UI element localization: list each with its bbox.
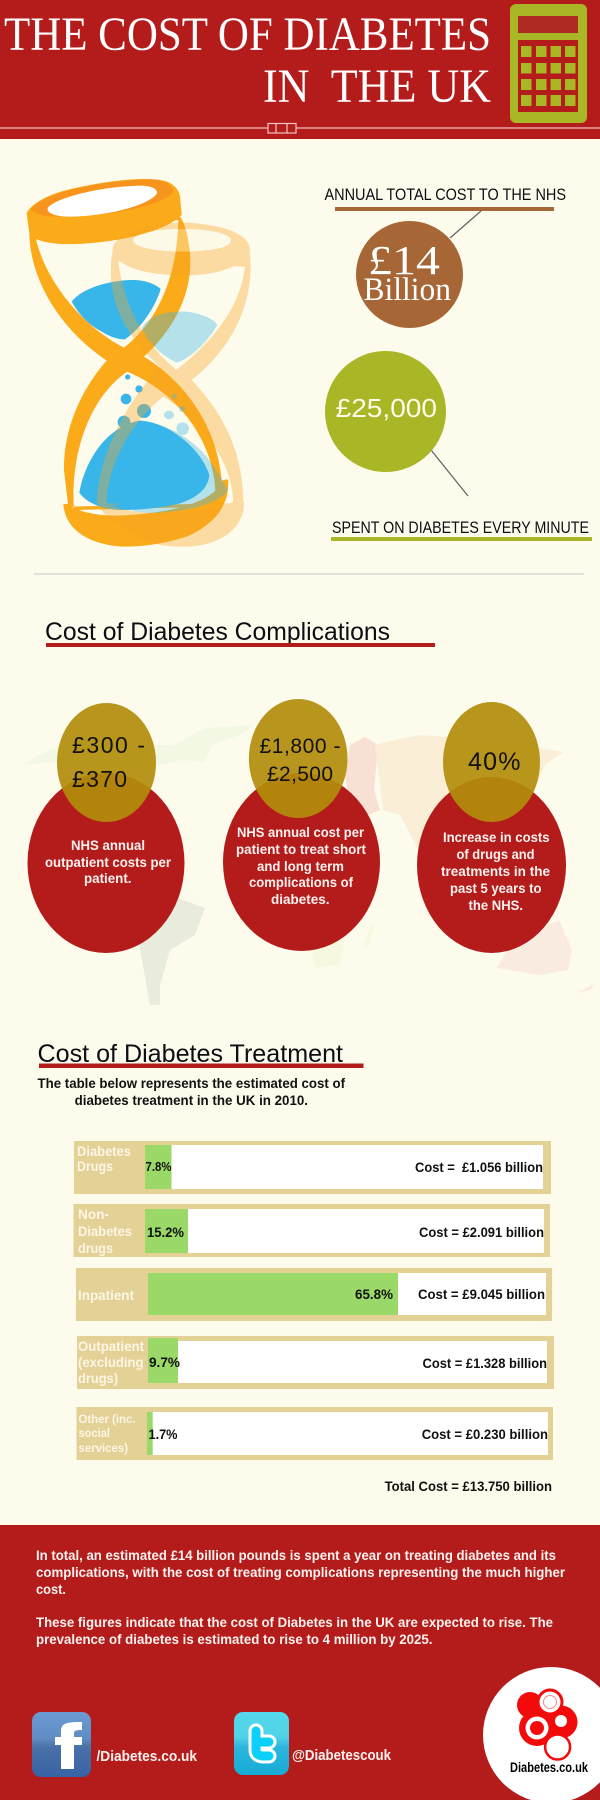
description 1: NHS annual <box>71 837 145 853</box>
heading: treatment: Cost of Diabetes Treatment <box>38 1040 343 1068</box>
row: other: Cost = £0.230 billion <box>422 1426 548 1442</box>
value: £300-£370: £300 - <box>72 732 145 758</box>
world map background <box>22 725 597 1005</box>
row: other <box>76 1407 553 1460</box>
row: inpatient: 65.8% <box>355 1286 394 1302</box>
heading: complications: Cost of Diabetes Complications <box>45 618 390 646</box>
icon: hourglass <box>27 179 251 547</box>
row: outpatient: (excluding <box>78 1354 144 1370</box>
row: non-diabetes drugs: 15.2% <box>147 1224 185 1240</box>
stat: £14 billion: Billion <box>364 272 451 308</box>
value: £300-£370 <box>72 732 145 792</box>
description 1 <box>45 837 172 886</box>
main hourglass <box>27 179 228 547</box>
text: twitter handle: @Diabetescouk <box>292 1747 392 1764</box>
row: diabetes drugs: 7.8% <box>146 1159 172 1174</box>
row: other: 1.7% <box>148 1426 178 1442</box>
row: non-diabetes drugs: Diabetes <box>78 1223 132 1239</box>
footer panel <box>0 1525 600 1800</box>
bar chart: cost by treatment <box>74 1141 554 1494</box>
panel: complication 1 <box>28 703 184 953</box>
icon: facebook <box>32 1712 91 1777</box>
row: diabetes drugs: Diabetes <box>77 1143 131 1159</box>
stat: £14 billion <box>356 221 463 328</box>
description 2: and long term <box>257 858 344 874</box>
description 2: patient to treat short <box>236 841 366 857</box>
value: £1,800-£2,500: £2,500 <box>267 763 333 786</box>
text block: summary: cost. <box>36 1581 66 1597</box>
description 3: of drugs and <box>456 846 534 862</box>
description 2 <box>236 824 366 907</box>
row: diabetes drugs <box>74 1141 551 1194</box>
row: diabetes drugs: Drugs <box>77 1158 113 1174</box>
row: diabetes drugs: Cost = £1.056 billion <box>415 1159 543 1175</box>
row: outpatient: 9.7% <box>149 1354 181 1370</box>
icon: calculator <box>510 4 587 123</box>
panel: complication 2 <box>223 699 380 951</box>
row: inpatient <box>76 1268 552 1321</box>
total cost: Total Cost = £13.750 billion <box>385 1478 552 1494</box>
header banner <box>0 0 600 139</box>
stat: £14 billion: £14 <box>368 237 440 283</box>
row: outpatient: Outpatient <box>78 1338 144 1354</box>
row: other: social <box>78 1426 110 1440</box>
row: other: Other (inc. <box>78 1412 136 1426</box>
description 1: patient. <box>84 870 132 886</box>
description 2: NHS annual cost per <box>237 824 365 840</box>
description 3: the NHS. <box>468 897 523 913</box>
description 2: diabetes. <box>271 891 330 907</box>
row: non-diabetes drugs: Cost = £2.091 billion <box>419 1224 544 1240</box>
panel: complication 3 <box>417 702 566 953</box>
value: £300-£370: £370 <box>72 766 127 792</box>
text block: summary: These figures indicate that the cost of Diabetes in the UK are expected to rise. The <box>36 1614 553 1630</box>
row: outpatient <box>77 1336 554 1389</box>
icon: twitter <box>234 1712 289 1775</box>
row: non-diabetes drugs: Non- <box>78 1206 109 1222</box>
panel: annual total cost <box>324 185 566 328</box>
row: other: services) <box>78 1441 128 1455</box>
description 1: outpatient costs per <box>45 854 172 870</box>
value: £1,800-£2,500: £1,800 - <box>260 735 340 758</box>
row: non-diabetes drugs <box>74 1204 550 1257</box>
title: IN THE UK <box>263 60 491 113</box>
row: outpatient: drugs) <box>78 1370 118 1386</box>
title: THE COST OF DIABETES <box>4 8 491 61</box>
description 2: complications of <box>249 874 353 890</box>
text block: table intro <box>38 1075 345 1108</box>
heading: annual total cost: ANNUAL TOTAL COST TO THE NHS <box>324 185 566 204</box>
text block: table intro: diabetes treatment in the UK in 2010. <box>75 1092 308 1108</box>
text: facebook handle: /Diabetes.co.uk <box>96 1748 198 1765</box>
row: inpatient: Cost = £9.045 billion <box>418 1286 545 1302</box>
description 3 <box>441 829 550 913</box>
description 3: treatments in the <box>441 863 550 879</box>
logo: diabetes.co.uk <box>483 1667 600 1800</box>
value: 40%: 40% <box>468 748 520 776</box>
text block: summary: complications, with the cost of treating complications representing the much higher <box>36 1564 566 1580</box>
stat: £25,000: £25,000 <box>336 393 437 423</box>
row: non-diabetes drugs: drugs <box>78 1240 113 1256</box>
ghost hourglass <box>97 223 251 547</box>
description 3: past 5 years to <box>450 880 542 896</box>
text block: summary <box>36 1547 566 1647</box>
row: outpatient: Cost = £1.328 billion <box>422 1355 547 1371</box>
row: inpatient: Inpatient <box>78 1287 134 1303</box>
stat: £25,000 <box>325 351 446 472</box>
panel: spent every minute <box>325 351 592 541</box>
description 3: Increase in costs <box>443 829 550 845</box>
title <box>4 8 491 113</box>
value: £1,800-£2,500 <box>260 735 340 786</box>
text block: table intro: The table below represents the estimated cost of <box>38 1075 345 1091</box>
text block: summary: prevalence of diabetes is estimated to rise to 4 million by 2025. <box>36 1631 432 1647</box>
text block: summary: In total, an estimated £14 billion pounds is spent a year on treating diabetes and its <box>36 1547 556 1563</box>
